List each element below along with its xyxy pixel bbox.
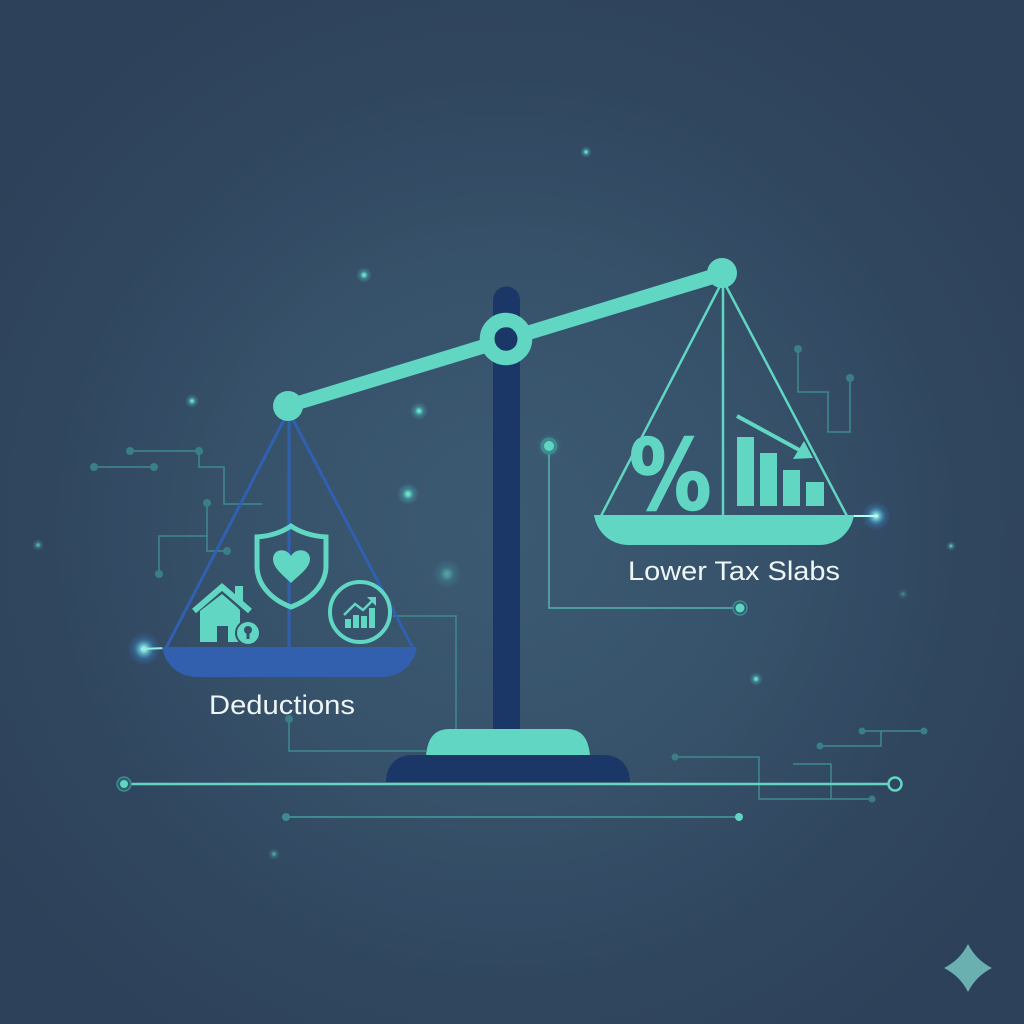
ground line [117, 777, 902, 791]
icon: percent sign: % [629, 419, 711, 533]
scale post [493, 286, 520, 730]
left pan strings [166, 418, 413, 648]
icon: descending bars with arrow [737, 416, 824, 506]
left flare [127, 632, 166, 666]
right pan [594, 515, 854, 545]
icon: growth chart in circle [330, 582, 390, 642]
label: Deductions: Deductions [209, 690, 355, 720]
left pan [162, 647, 417, 677]
circuit lines [90, 345, 928, 802]
right flare [852, 501, 891, 531]
right pan strings [601, 286, 847, 516]
icon: house with key lock [194, 586, 261, 646]
lower line [282, 813, 743, 821]
scale base [386, 729, 630, 782]
label: Lower Tax Slabs: Lower Tax Slabs [628, 556, 840, 586]
sparkles [32, 146, 956, 860]
icon: corner star [944, 944, 992, 992]
connector node line [536, 433, 747, 615]
icon: shield with heart [257, 526, 326, 607]
beam [273, 258, 737, 421]
